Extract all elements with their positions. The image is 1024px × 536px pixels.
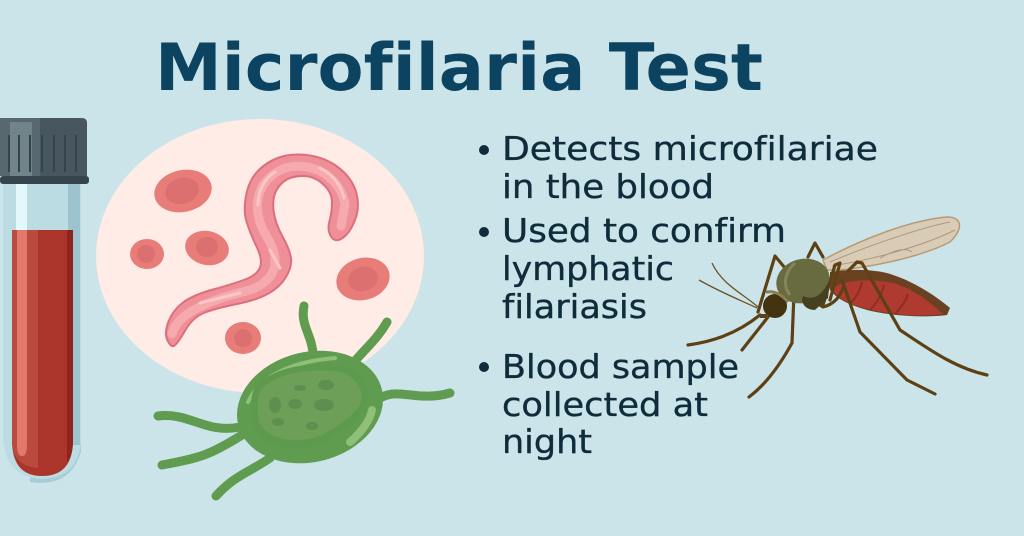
panel: blood smear circle — [96, 119, 424, 393]
icon: mosquito — [688, 217, 987, 397]
bullet: detects microfilariae: Detects microfilariae — [502, 130, 878, 168]
mosquito abdomen — [830, 270, 950, 316]
bullet: confirm lymphatic filariasis: Used to confirm — [502, 212, 786, 250]
bullet: confirm lymphatic filariasis: filariasis — [502, 288, 647, 326]
icon: red blood cells — [130, 164, 395, 354]
mosquito wing — [823, 217, 959, 270]
title: Microfilaria Test — [155, 31, 763, 106]
bullet: confirm lymphatic filariasis: lymphatic — [502, 250, 674, 288]
bullet: blood sample at night: collected at — [502, 386, 708, 424]
bullet: blood sample at night — [479, 348, 739, 461]
icon: green parasite cell — [158, 306, 450, 496]
mosquito legs — [688, 243, 987, 397]
bullet: confirm lymphatic filariasis — [479, 212, 786, 326]
bullet: blood sample at night: night — [502, 423, 592, 461]
bullet list — [479, 130, 878, 461]
mosquito thorax and head — [771, 253, 835, 309]
bullet: detects microfilariae — [479, 130, 878, 206]
icon: microfilaria worm — [166, 154, 358, 346]
icon: blood test tube — [0, 118, 89, 483]
bullet: detects microfilariae: in the blood — [502, 168, 714, 206]
bullet: blood sample at night: Blood sample — [502, 348, 739, 386]
